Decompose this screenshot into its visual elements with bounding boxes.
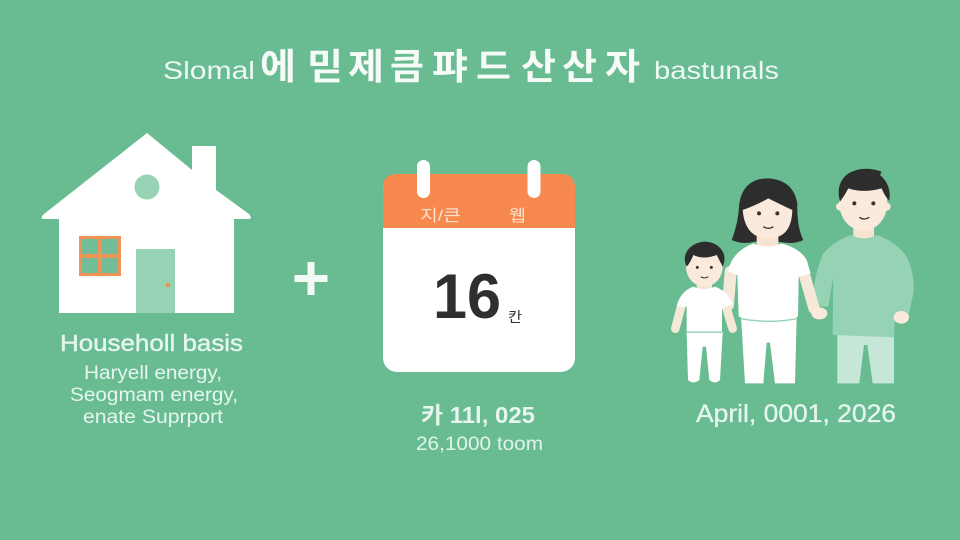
title: 제 [348, 46, 384, 87]
house door [136, 249, 175, 313]
calendar header text: 지/큰 [420, 207, 461, 225]
household description: Haryell energy, [84, 363, 222, 384]
mother [728, 178, 827, 383]
title: bastunals [654, 57, 779, 85]
title: 큼 [390, 46, 424, 87]
calendar header [383, 174, 575, 228]
title: 산 [562, 46, 597, 87]
title: 드 [476, 46, 511, 87]
icon: plus [294, 262, 328, 295]
calendar header text [420, 207, 526, 225]
calendar date number: 16 [433, 262, 501, 332]
title: Slomal [163, 57, 255, 85]
family date: April, 0001, 2026 [696, 400, 896, 428]
title [163, 46, 779, 87]
father [813, 169, 914, 383]
household heading: Householl basis [60, 330, 243, 356]
icon: house [42, 133, 251, 313]
title: 산 [521, 46, 556, 87]
household description [70, 363, 238, 428]
household description: Seogmam energy, [70, 385, 238, 406]
calendar [383, 160, 575, 372]
title: 에 [260, 46, 296, 87]
calendar header text: 웹 [509, 207, 526, 225]
calendar subtext: 26,1000 toom [416, 434, 543, 455]
title: 믿 [307, 46, 343, 87]
title: 자 [605, 46, 640, 87]
house window [79, 236, 121, 276]
attic round window [134, 174, 160, 200]
household description: enate Suprport [83, 407, 224, 428]
family illustration [675, 169, 914, 383]
title: 퍄 [432, 46, 468, 87]
calendar amount: 카 11l, 025 [421, 402, 535, 428]
child [675, 242, 733, 382]
calendar page [383, 174, 575, 372]
calendar date unit: 칸 [508, 309, 522, 325]
calendar rings [417, 160, 540, 198]
